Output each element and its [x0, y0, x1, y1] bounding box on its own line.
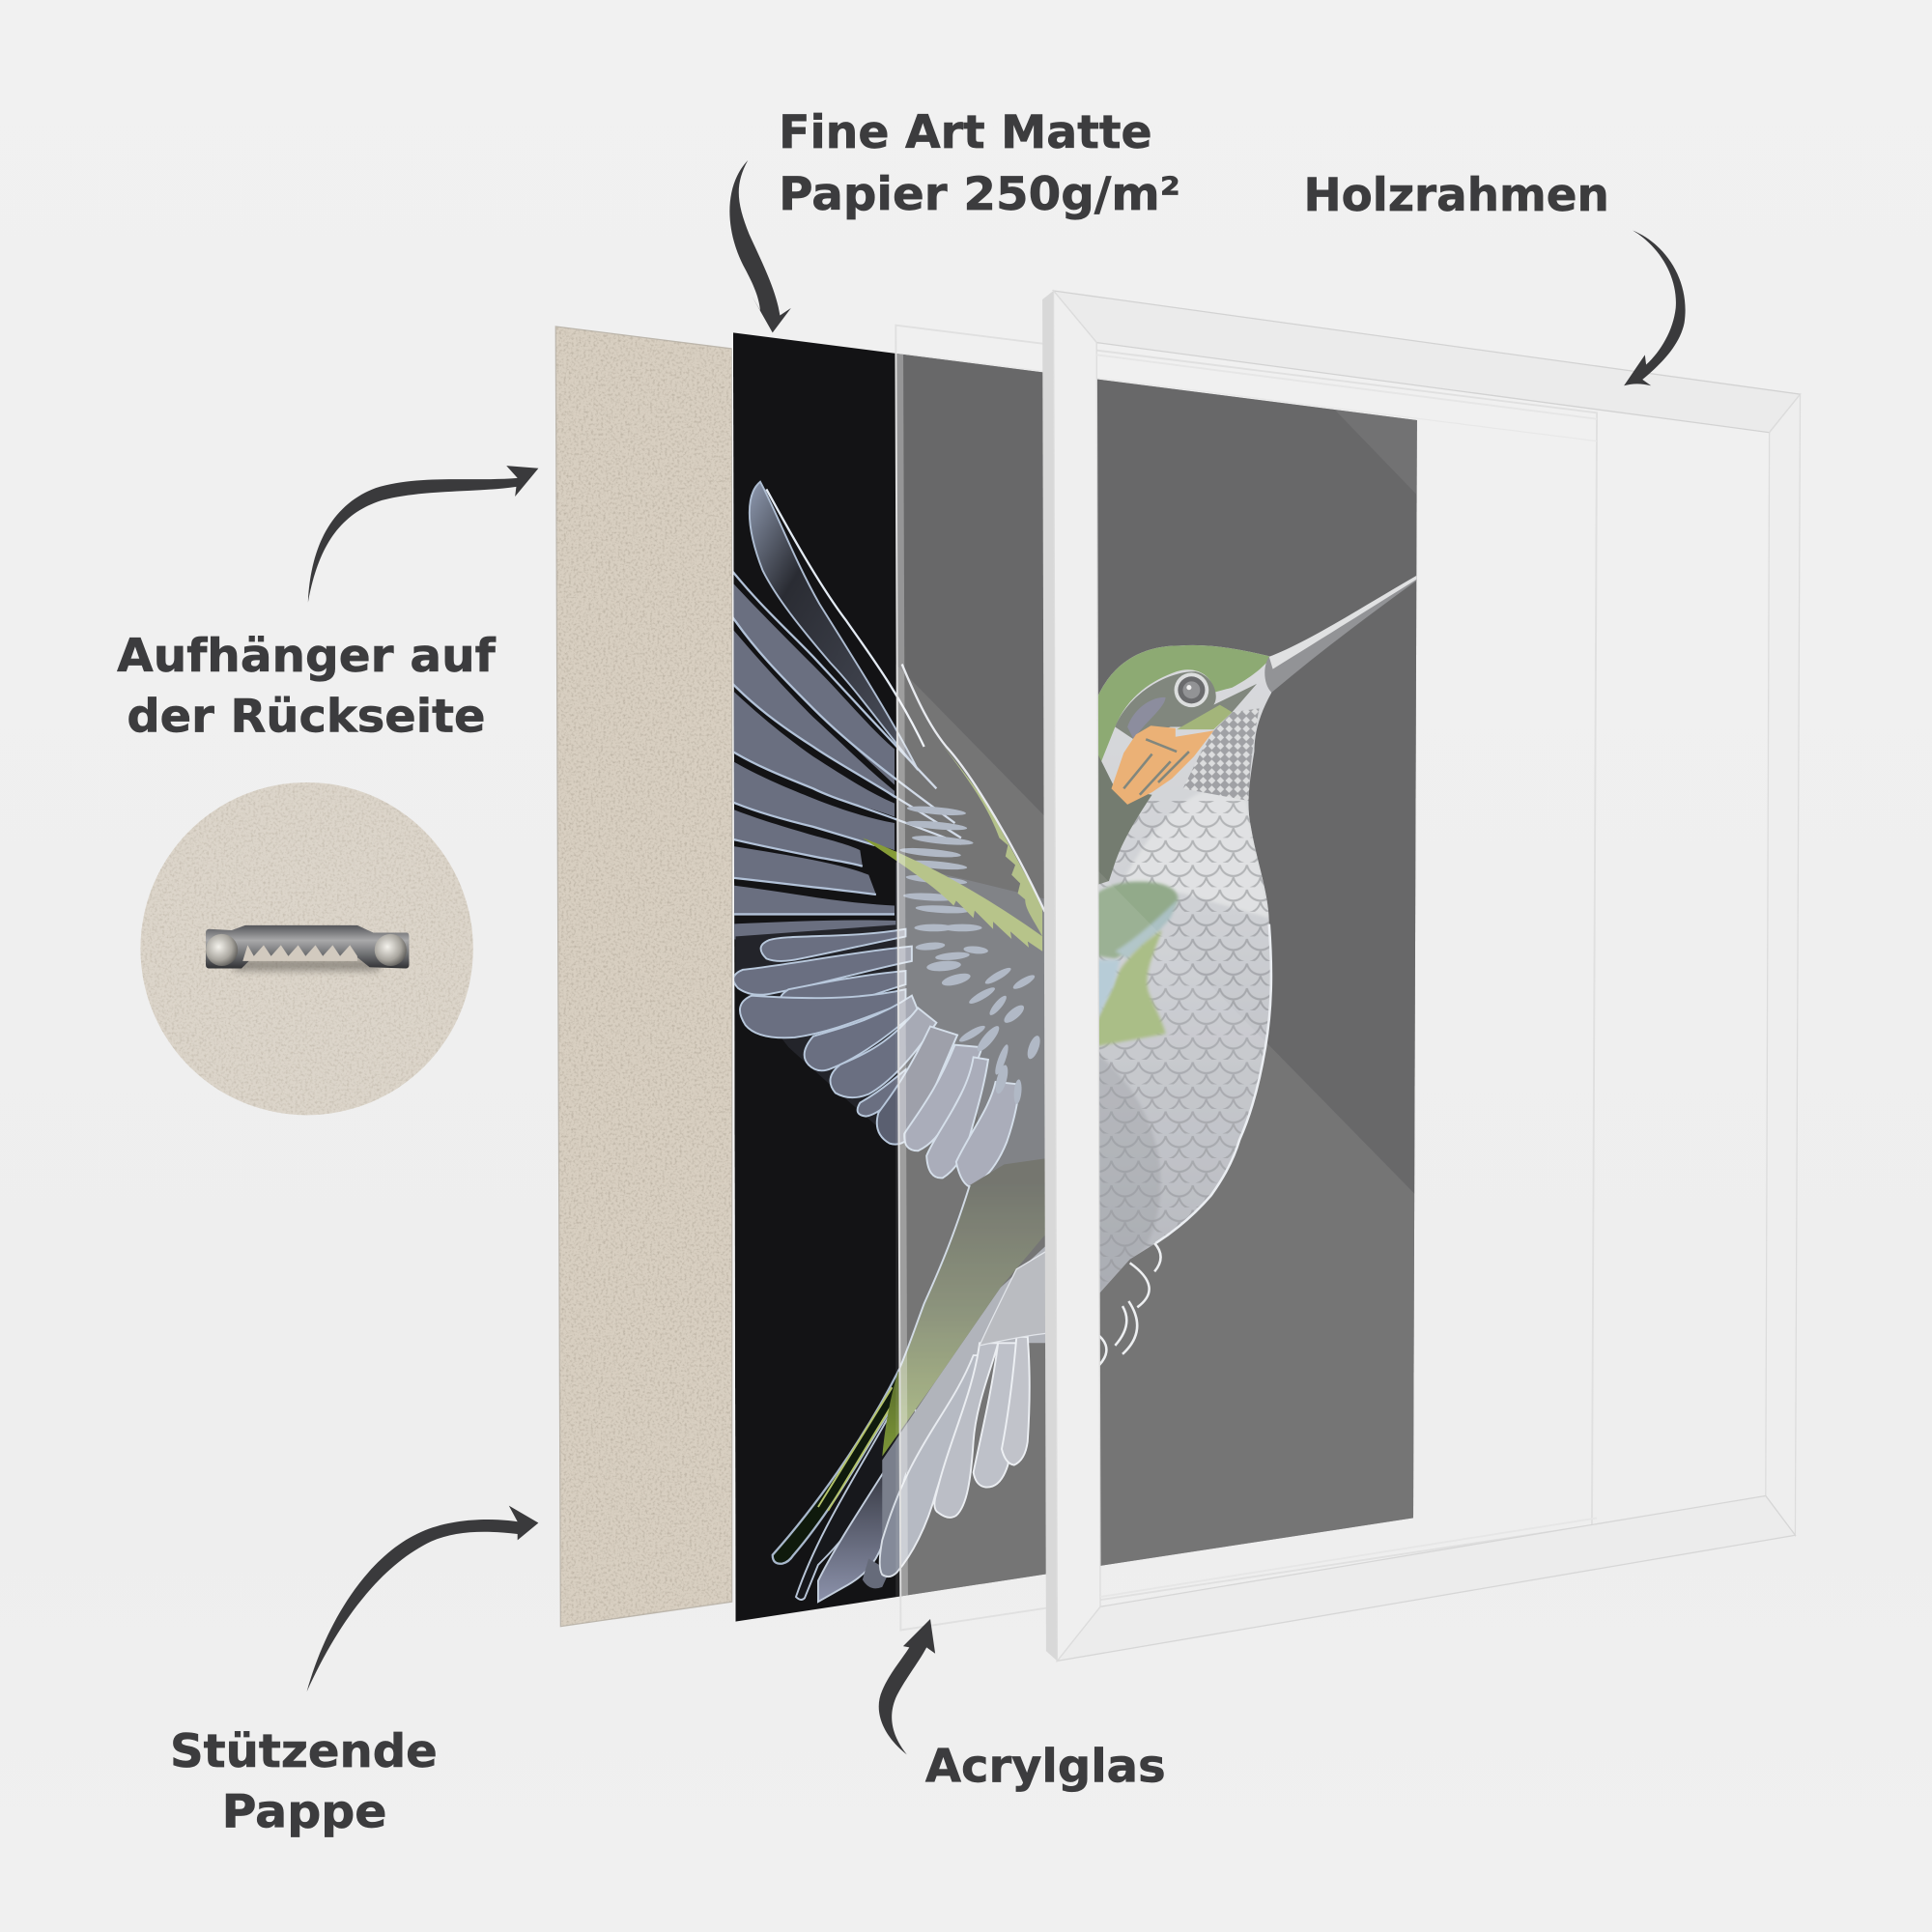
label: Aufhaenger auf der Rueckseite — [117, 630, 496, 744]
feet — [1099, 1243, 1161, 1365]
panel: acrylic glass — [895, 326, 1597, 1638]
panel: fine art paper — [727, 332, 1417, 1622]
label: Holzrahmen: Holzrahmen — [1303, 169, 1609, 222]
label: Fine Art Matte Papier: Fine Art Matte — [779, 106, 1152, 159]
undertail coverts — [980, 1251, 1047, 1346]
label: Stuetzende Pappe — [170, 1725, 438, 1839]
panel: hanger detail circle — [135, 777, 480, 1122]
orange throat patch — [1112, 725, 1213, 805]
wing lobe shadow — [736, 924, 901, 1125]
arrow: to frame from Holzrahmen label — [1624, 231, 1686, 385]
bird body — [1097, 576, 1416, 1366]
arrow: to paper from Fine Art label — [729, 160, 791, 332]
label: Fine Art Matte Papier: Papier 250g/m² — [779, 168, 1180, 221]
wing coverts — [899, 805, 1042, 1104]
panel: supporting cardboard — [549, 321, 739, 1633]
arrow: to cardboard from Stuetzende Pappe label — [307, 1506, 538, 1691]
label: Fine Art Matte Papier — [779, 106, 1180, 221]
label: Acrylglas: Acrylglas — [925, 1740, 1166, 1793]
arrow: to cardboard from hanger label — [308, 466, 538, 603]
hummingbird artwork — [727, 482, 1417, 1602]
wing — [727, 482, 1047, 1188]
gray tail coverts — [882, 1244, 1047, 1540]
dark wing base — [895, 863, 1047, 1182]
beak — [1264, 576, 1417, 693]
panel: wooden frame — [1042, 291, 1801, 1661]
arrow: to acrylic from Acrylglas label — [879, 1619, 935, 1754]
shoulder green — [1091, 882, 1178, 958]
tail — [773, 1158, 1047, 1602]
label: Stuetzende Pappe: Stützende — [170, 1725, 438, 1778]
feather rims — [727, 564, 961, 914]
glare bands — [895, 401, 1430, 1638]
label: Aufhaenger auf der Rueckseite: der Rückseite — [127, 691, 486, 744]
infographic canvas — [116, 112, 1801, 1837]
green wing edges — [936, 737, 1042, 936]
wing lobes — [733, 929, 1019, 1188]
icon: sawtooth hanger — [206, 925, 409, 971]
eye — [1175, 672, 1208, 707]
label: Stuetzende Pappe: Pappe — [222, 1786, 387, 1839]
upper wing feathers — [733, 583, 896, 939]
green back — [882, 1158, 1047, 1457]
label: Aufhaenger auf der Rueckseite: Aufhänger auf — [117, 630, 496, 683]
